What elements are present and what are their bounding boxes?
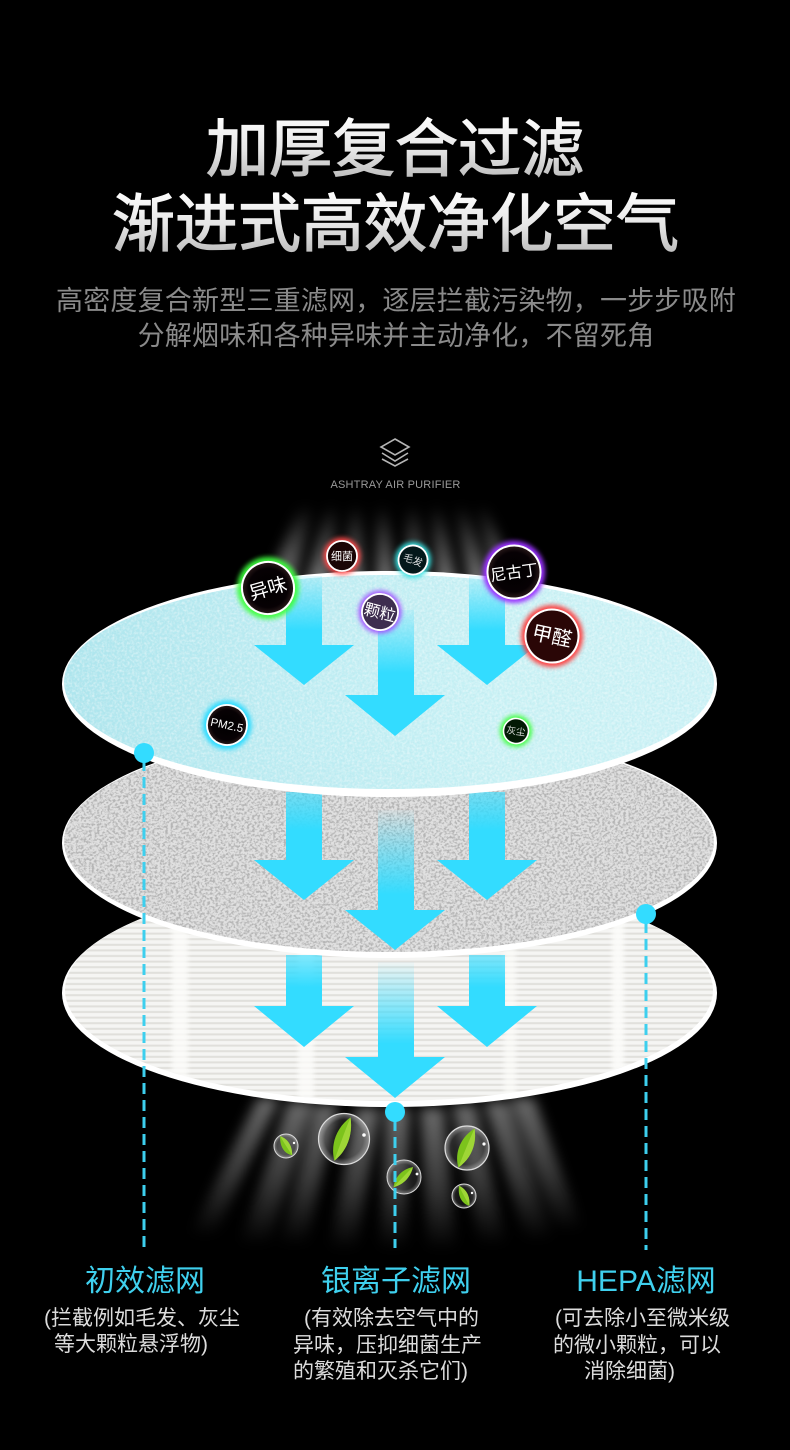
bubble: 灰尘 — [498, 713, 534, 749]
bubble: 甲醛: 甲醛 — [530, 621, 574, 652]
subtitle text: 高密度复合新型三重滤网，逐层拦截污染物，一步步吸附 — [56, 286, 736, 316]
bubble: 异味 — [230, 550, 306, 626]
bubble: leaf small right — [452, 1184, 476, 1208]
label: primary filter: (拦截例如毛发、灰尘 — [44, 1307, 240, 1330]
title: 加厚复合过滤 — [206, 115, 584, 185]
arrows on silver ion disc — [254, 792, 537, 950]
light rays below filter — [190, 1098, 582, 1250]
bubble: PM2.5 — [198, 696, 256, 754]
arrows on primary disc — [254, 576, 537, 736]
brand label: ASHTRAY AIR PURIFIER — [330, 479, 461, 491]
bubble: 毛发: 毛发 — [401, 550, 425, 570]
infographic canvas — [45, 116, 735, 1382]
bubble: 毛发 — [390, 537, 436, 583]
label: HEPA filter: (可去除小至微米级 — [555, 1307, 730, 1330]
label: silver ion filter: 银离子滤网 — [321, 1265, 471, 1298]
label: primary filter: 初效滤网 — [85, 1265, 205, 1298]
label: HEPA filter — [553, 1265, 730, 1383]
label: silver ion filter: 的繁殖和灭杀它们) — [293, 1360, 468, 1383]
bubble: 颗粒: 颗粒 — [362, 600, 397, 626]
bubble: 细菌 — [324, 538, 360, 574]
bubble: 颗粒 — [354, 586, 406, 638]
light rays above filter — [264, 505, 520, 590]
label: silver ion filter: 异味，压抑细菌生产 — [293, 1334, 482, 1357]
subtitle text: 分解烟味和各种异味并主动净化，不留死角 — [138, 321, 654, 351]
bubble: leaf small left — [274, 1134, 298, 1158]
bubble: 甲醛 — [515, 599, 589, 673]
title: 渐进式高效净化空气 — [112, 190, 679, 260]
filter disc: silver ion — [62, 762, 717, 958]
filter disc: HEPA — [62, 918, 717, 1107]
arrows on HEPA disc — [254, 955, 537, 1098]
bubble: 细菌: 细菌 — [331, 550, 353, 563]
bubble: leaf large left — [318, 1114, 370, 1164]
label: silver ion filter — [293, 1265, 482, 1383]
leader line: silver ion filter — [385, 1102, 405, 1248]
clean air leaf bubbles — [274, 1114, 489, 1208]
title — [112, 115, 679, 260]
bubble: 灰尘: 灰尘 — [506, 724, 527, 739]
label: primary filter: 等大颗粒悬浮物) — [54, 1333, 208, 1356]
pollutant bubbles — [198, 537, 589, 754]
bubble: 尼古丁: 尼古丁 — [489, 561, 539, 585]
leader line: HEPA filter — [636, 904, 656, 1250]
leader line: primary filter — [134, 743, 154, 1248]
label: HEPA filter: 的微小颗粒，可以 — [553, 1334, 721, 1357]
label: HEPA filter: 消除细菌) — [584, 1360, 675, 1383]
bubble: PM2.5: PM2.5 — [209, 717, 244, 735]
label: primary filter — [44, 1265, 240, 1356]
label: HEPA filter: HEPA滤网 — [576, 1265, 716, 1298]
bubble: leaf center — [387, 1160, 421, 1194]
bubble: 异味: 异味 — [247, 573, 290, 605]
icon: layers — [381, 439, 409, 466]
label: silver ion filter: (有效除去空气中的 — [304, 1307, 479, 1330]
bubble: leaf large right — [445, 1126, 489, 1170]
subtitle text — [56, 286, 736, 351]
filter disc: primary — [60, 570, 720, 800]
bubble: 尼古丁 — [479, 537, 549, 607]
